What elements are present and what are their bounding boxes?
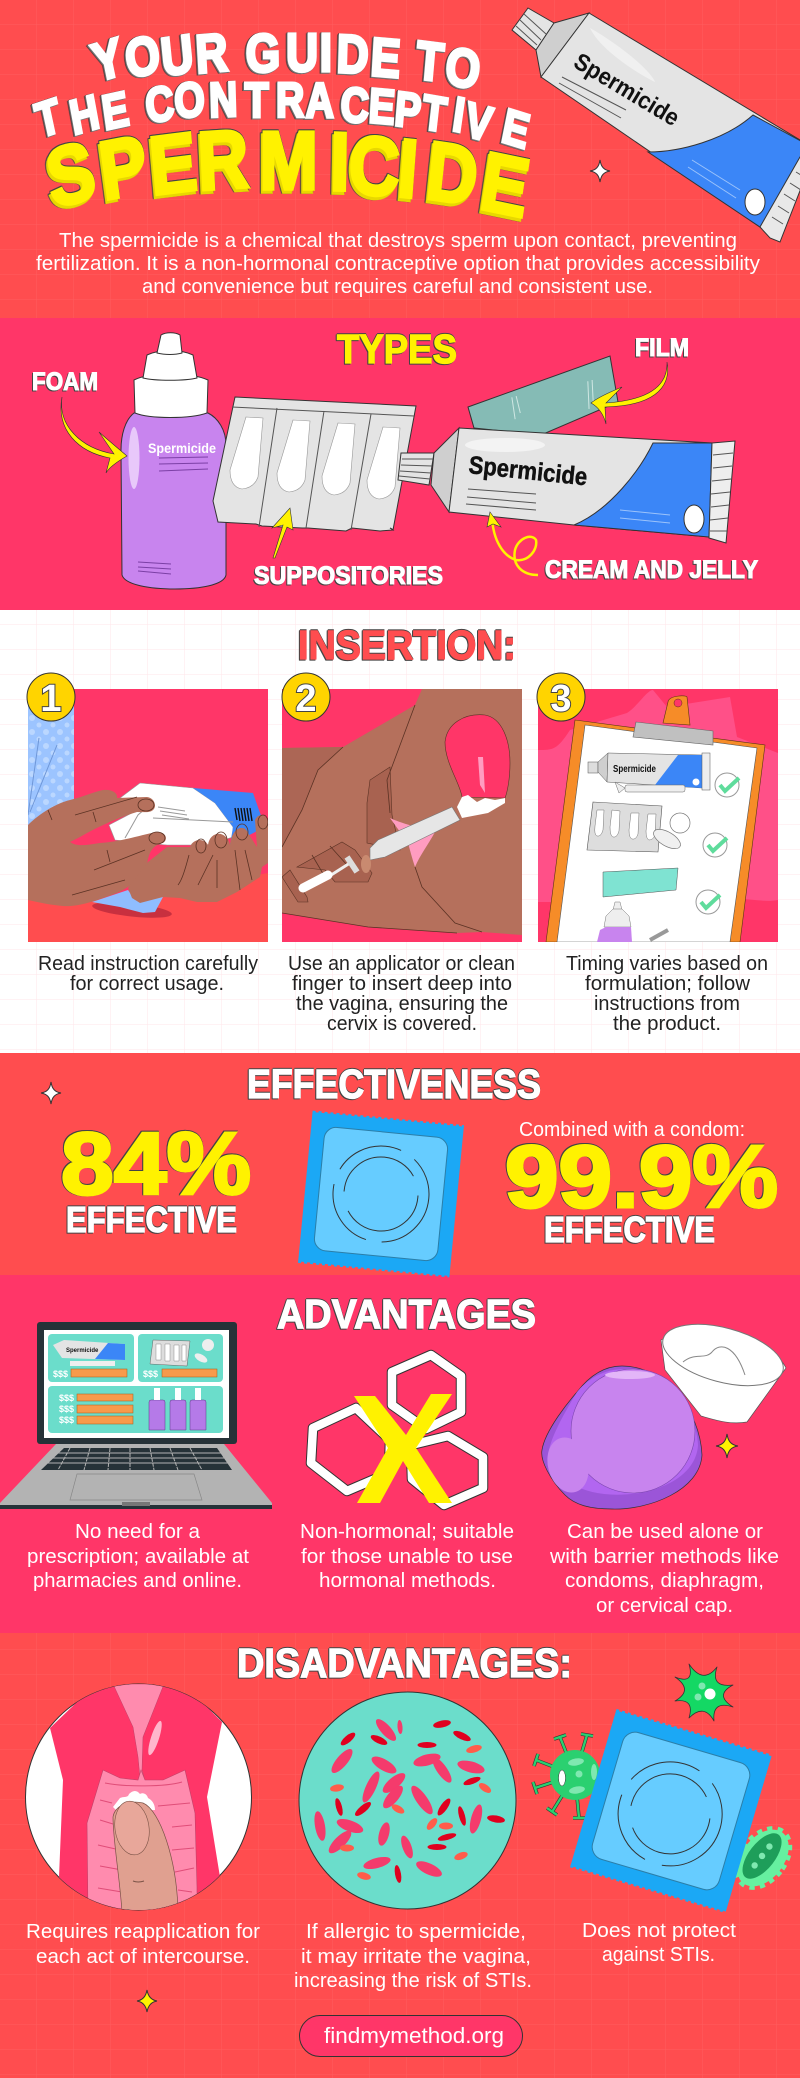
hands xyxy=(28,790,166,906)
caption: barrier methods: or cervical cap. xyxy=(596,1595,733,1617)
arrow: suppositories xyxy=(272,508,293,558)
caption: irritation: If allergic to spermicide, xyxy=(306,1921,526,1943)
icon: sparkle xyxy=(716,1434,738,1458)
icon: cream tube xyxy=(398,428,735,543)
intro text xyxy=(36,230,760,298)
tube label: Spermicide xyxy=(467,451,589,491)
icon: germ xyxy=(675,1664,733,1721)
title line 2: THECONTRACEPTIVE xyxy=(31,72,534,160)
icon: condom packet xyxy=(298,1112,464,1276)
icon: laptop: $$$ xyxy=(59,1404,74,1414)
title xyxy=(31,22,535,236)
icon: suppositories blister xyxy=(213,397,416,531)
title line 3: SPERMICIDE xyxy=(40,113,535,236)
step 3 caption xyxy=(566,952,768,1035)
caption: no prescription: pharmacies and online. xyxy=(33,1570,242,1592)
number badge 2 xyxy=(282,673,330,721)
illustration: finger reapplication xyxy=(26,1680,252,1920)
icon: laptop: $$$ xyxy=(53,1369,68,1379)
step 2 caption: the vagina, ensuring the xyxy=(296,992,508,1015)
number badge 1: 1 xyxy=(40,678,62,720)
step 1 illustration xyxy=(28,689,268,942)
tube label: Spermicide xyxy=(569,48,684,132)
caption: barrier methods xyxy=(549,1521,779,1617)
label: cream and jelly: CREAM AND JELLY xyxy=(545,556,758,584)
icon: laptop: Spermicide xyxy=(66,1348,99,1354)
icon: sparkle xyxy=(41,1082,61,1104)
mini tube: Spermicide xyxy=(613,764,656,775)
mini bottle xyxy=(597,902,668,942)
heading: types: TYPES xyxy=(337,326,457,372)
panel: insertion xyxy=(27,622,778,1035)
stat: 84%: 84% xyxy=(61,1114,251,1213)
bottle label: Spermicide xyxy=(148,441,216,456)
stat: 99.9%: 99.9% xyxy=(505,1127,778,1226)
panel: advantages xyxy=(0,1291,790,1617)
website pill: findmymethod.org xyxy=(324,2023,504,2048)
arrow: foam xyxy=(61,397,127,473)
intro text: fertilization. It is a non-hormonal contraceptive option that provides accessibility xyxy=(36,253,760,275)
arrow: film xyxy=(591,362,668,424)
icon: crossed-out hormone hexagons xyxy=(311,1355,483,1505)
heading: insertion: INSERTION: xyxy=(298,622,516,668)
icon: laptop: $$$ xyxy=(59,1415,74,1425)
label: foam: FOAM xyxy=(32,368,98,396)
mini film xyxy=(603,868,678,897)
caption: irritation: it may irritate the vagina, xyxy=(301,1946,531,1968)
icon: sparkle xyxy=(137,1990,157,2012)
caption: barrier methods: Can be used alone or xyxy=(567,1521,763,1543)
step 2 caption xyxy=(288,952,515,1035)
icon: condom packet xyxy=(570,1710,772,1912)
label: effective: EFFECTIVE xyxy=(544,1209,715,1250)
medicine box xyxy=(109,783,233,845)
step 3 illustration xyxy=(538,689,778,942)
caption: reapplication: each act of intercourse. xyxy=(36,1946,250,1968)
applicator xyxy=(370,807,460,860)
step 2 illustration xyxy=(282,689,522,942)
title line 1: YOURGUIDETO xyxy=(87,22,484,101)
mini suppositories xyxy=(587,802,690,853)
caption: irritation xyxy=(294,1921,532,1992)
yellow X xyxy=(354,1394,452,1503)
icon: sparkle xyxy=(590,160,610,182)
mini tube xyxy=(588,753,710,793)
panel: types xyxy=(32,326,758,590)
number badge 1 xyxy=(27,673,75,721)
intro text: and convenience but requires careful and consistent use. xyxy=(142,276,653,298)
caption: reapplication: Requires reapplication for xyxy=(26,1921,260,1943)
caption: no STI protection xyxy=(582,1920,736,1966)
panel: disadvantages xyxy=(26,1640,799,2056)
caption: reapplication xyxy=(26,1921,260,1968)
icon: spermicide tube xyxy=(512,8,800,242)
caption: non-hormonal: hormonal methods. xyxy=(319,1570,496,1592)
website pill xyxy=(300,2016,522,2056)
step 1 caption xyxy=(38,952,259,995)
step 3 caption: instructions from xyxy=(594,992,740,1015)
caption: no prescription: No need for a xyxy=(75,1521,201,1543)
icon: virus xyxy=(533,1734,600,1818)
caption: non-hormonal: for those unable to use xyxy=(301,1546,513,1568)
heading: effectiveness: EFFECTIVENESS xyxy=(247,1061,541,1107)
icon: laptop xyxy=(0,1322,272,1509)
step 3 caption: formulation; follow xyxy=(585,972,750,995)
step 2 caption: Use an applicator or clean xyxy=(288,952,515,975)
caption: no prescription xyxy=(27,1521,249,1592)
icon: bacteria xyxy=(727,1820,799,1896)
step 1 caption: for correct usage. xyxy=(70,972,224,995)
number badge 3 xyxy=(537,673,585,721)
caption: irritation: increasing the risk of STIs. xyxy=(294,1970,532,1992)
icon: film xyxy=(468,356,618,435)
caption: no prescription: prescription; available at xyxy=(27,1546,249,1568)
arrow: cream and jelly xyxy=(487,512,538,575)
step 1 caption: Read instruction carefully xyxy=(38,952,259,975)
label: film: FILM xyxy=(635,334,689,362)
heading: advantages: ADVANTAGES xyxy=(277,1291,536,1337)
label: effective: EFFECTIVE xyxy=(66,1199,237,1240)
heading: disadvantages: DISADVANTAGES: xyxy=(237,1640,572,1686)
step 2 caption: cervix is covered. xyxy=(327,1012,477,1035)
step 3 caption: Timing varies based on xyxy=(566,952,768,975)
header panel xyxy=(31,8,800,298)
step 3 caption: the product. xyxy=(613,1012,721,1035)
icon: diaphragm and cervical cap xyxy=(541,1313,790,1509)
caption: combined with a condom: Combined with a condom: xyxy=(519,1119,745,1141)
icon: laptop: $$$ xyxy=(59,1393,74,1403)
panel: effectiveness xyxy=(41,1061,778,1276)
caption: no STI protection: against STIs. xyxy=(602,1944,715,1966)
caption: non-hormonal xyxy=(300,1521,514,1592)
icon: foam bottle xyxy=(121,333,226,589)
number badge 2: 2 xyxy=(295,678,317,720)
intro text: The spermicide is a chemical that destroys sperm upon contact, preventing xyxy=(59,230,737,252)
check marks xyxy=(696,773,739,914)
icon: laptop: $$$ xyxy=(143,1369,158,1379)
caption: non-hormonal: Non-hormonal; suitable xyxy=(300,1521,514,1543)
number badge 3: 3 xyxy=(550,678,572,720)
caption: barrier methods: with barrier methods like xyxy=(549,1546,779,1568)
caption: no STI protection: Does not protect xyxy=(582,1920,736,1942)
step 2 caption: finger to insert deep into xyxy=(292,972,512,995)
illustration: irritated cells xyxy=(299,1692,516,1909)
caption: barrier methods: condoms, diaphragm, xyxy=(565,1570,764,1592)
label: suppositories: SUPPOSITORIES xyxy=(254,562,443,590)
